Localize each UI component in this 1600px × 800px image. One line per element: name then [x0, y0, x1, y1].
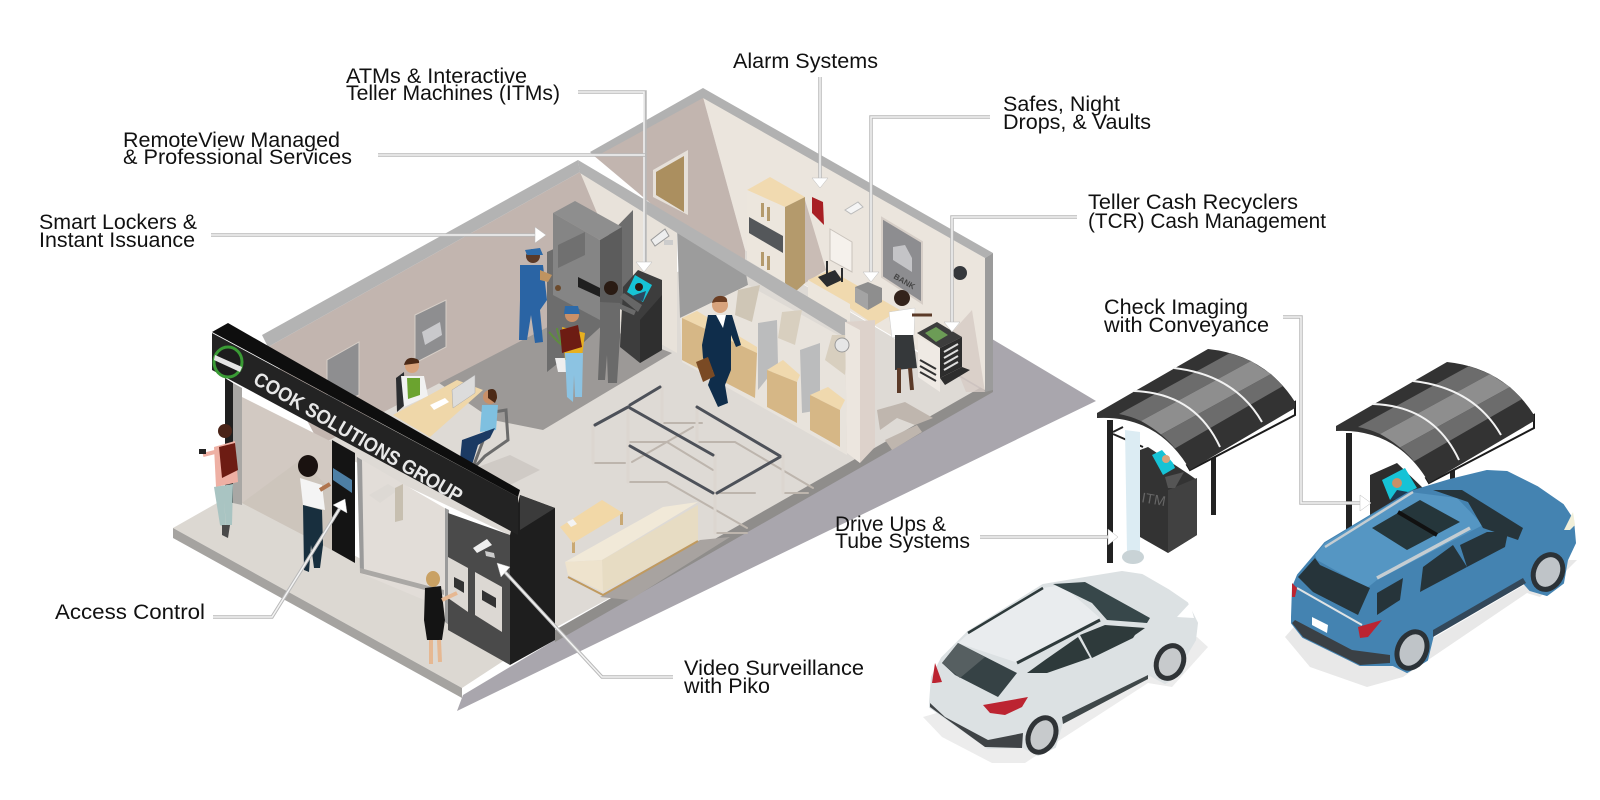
blue car	[1285, 471, 1577, 687]
label: Check Imaging: with Conveyance	[1103, 314, 1269, 337]
wall clock	[953, 266, 967, 280]
left wall posters	[327, 300, 446, 410]
seated customer	[460, 389, 508, 470]
label: ATMs and ITMs: ATMs & Interactive	[346, 65, 527, 88]
outdoor camera	[473, 539, 495, 558]
woman at ATM	[424, 571, 457, 664]
label: Safes: Safes, Night	[1003, 93, 1120, 116]
wall panel and wall camera	[830, 202, 863, 272]
storefront sign and tower	[212, 323, 555, 665]
label: RemoteView: & Professional Services	[123, 146, 352, 169]
label: RemoteView: RemoteView Managed	[123, 129, 340, 152]
smart lockers	[547, 201, 633, 372]
partition end post	[835, 320, 875, 463]
gray ground slab	[457, 339, 1096, 711]
back counter with router and safe	[808, 261, 900, 325]
glass door	[357, 457, 449, 625]
connector: Safes	[863, 117, 990, 282]
seated banker	[396, 358, 428, 412]
label: Video Surveillance: Video Surveillance	[684, 657, 864, 680]
outdoor ATMs	[448, 557, 502, 632]
teller chairs	[735, 285, 848, 375]
drive-up lane canopy with tube system and ITM: ITM	[1140, 489, 1167, 509]
customer with plant and backpack	[549, 306, 585, 402]
bank poster: BANK	[892, 272, 917, 291]
floor	[320, 250, 993, 642]
access control panel	[332, 440, 355, 563]
bank poster	[882, 218, 922, 303]
sofa	[565, 502, 698, 595]
sign lettering: COOK SOLUTIONS GROUP	[249, 368, 466, 507]
white car	[923, 572, 1208, 763]
connector: Video Surveillance	[497, 563, 673, 677]
rear walls	[590, 88, 993, 392]
label: Smart Lockers: Instant Issuance	[39, 229, 195, 252]
man in gray suit at kiosk	[598, 281, 635, 383]
connector: Smart Lockers	[211, 227, 546, 243]
label: Access Control: Access Control	[55, 601, 205, 624]
connector: Check Imaging	[1283, 317, 1371, 511]
desk with monitor	[393, 375, 483, 437]
logo	[214, 347, 242, 377]
partition	[578, 160, 847, 455]
connector: Teller Cash Recyclers	[944, 217, 1077, 332]
wall security camera	[651, 229, 673, 246]
connector: Drive Ups	[980, 529, 1118, 545]
connector: RemoteView	[378, 153, 645, 157]
teller counters	[682, 311, 845, 447]
sidewalk	[173, 490, 520, 698]
label: Smart Lockers: Smart Lockers &	[39, 211, 197, 234]
label: Safes: Drops, & Vaults	[1003, 111, 1151, 134]
teller cash recycler	[917, 322, 970, 392]
label: Video Surveillance: with Piko	[683, 675, 770, 698]
storefront interior	[225, 378, 332, 550]
second canopy with conveyance ITM	[1336, 362, 1534, 533]
connector: Access Control	[213, 499, 347, 617]
front room left wall	[262, 160, 677, 445]
woman with backpack	[199, 424, 238, 538]
label: Drive Ups: Tube Systems	[835, 530, 970, 553]
label: Drive Ups: Drive Ups &	[835, 513, 946, 536]
door	[653, 150, 688, 215]
label: Teller Cash Recyclers: Teller Cash Recyclers	[1088, 191, 1298, 214]
label: Teller Cash Recyclers: (TCR) Cash Management	[1088, 210, 1326, 233]
label: Check Imaging: Check Imaging	[1104, 296, 1248, 319]
label: ATMs and ITMs: Teller Machines (ITMs)	[346, 82, 560, 105]
cabinet	[747, 177, 805, 292]
teller woman	[889, 290, 932, 393]
stanchions	[593, 387, 813, 533]
ITM kiosk	[620, 270, 662, 363]
delivery worker	[519, 248, 561, 343]
connector: Alarm Systems	[812, 77, 828, 188]
businessman with briefcase	[696, 296, 741, 407]
drive-up lane canopy with tube system and ITM	[1097, 349, 1295, 564]
label: Alarm Systems: Alarm Systems	[733, 50, 878, 73]
alarm box	[812, 197, 824, 225]
woman at access panel	[298, 455, 330, 572]
connector: ATMs and ITMs	[578, 92, 652, 272]
coffee table	[560, 500, 623, 553]
